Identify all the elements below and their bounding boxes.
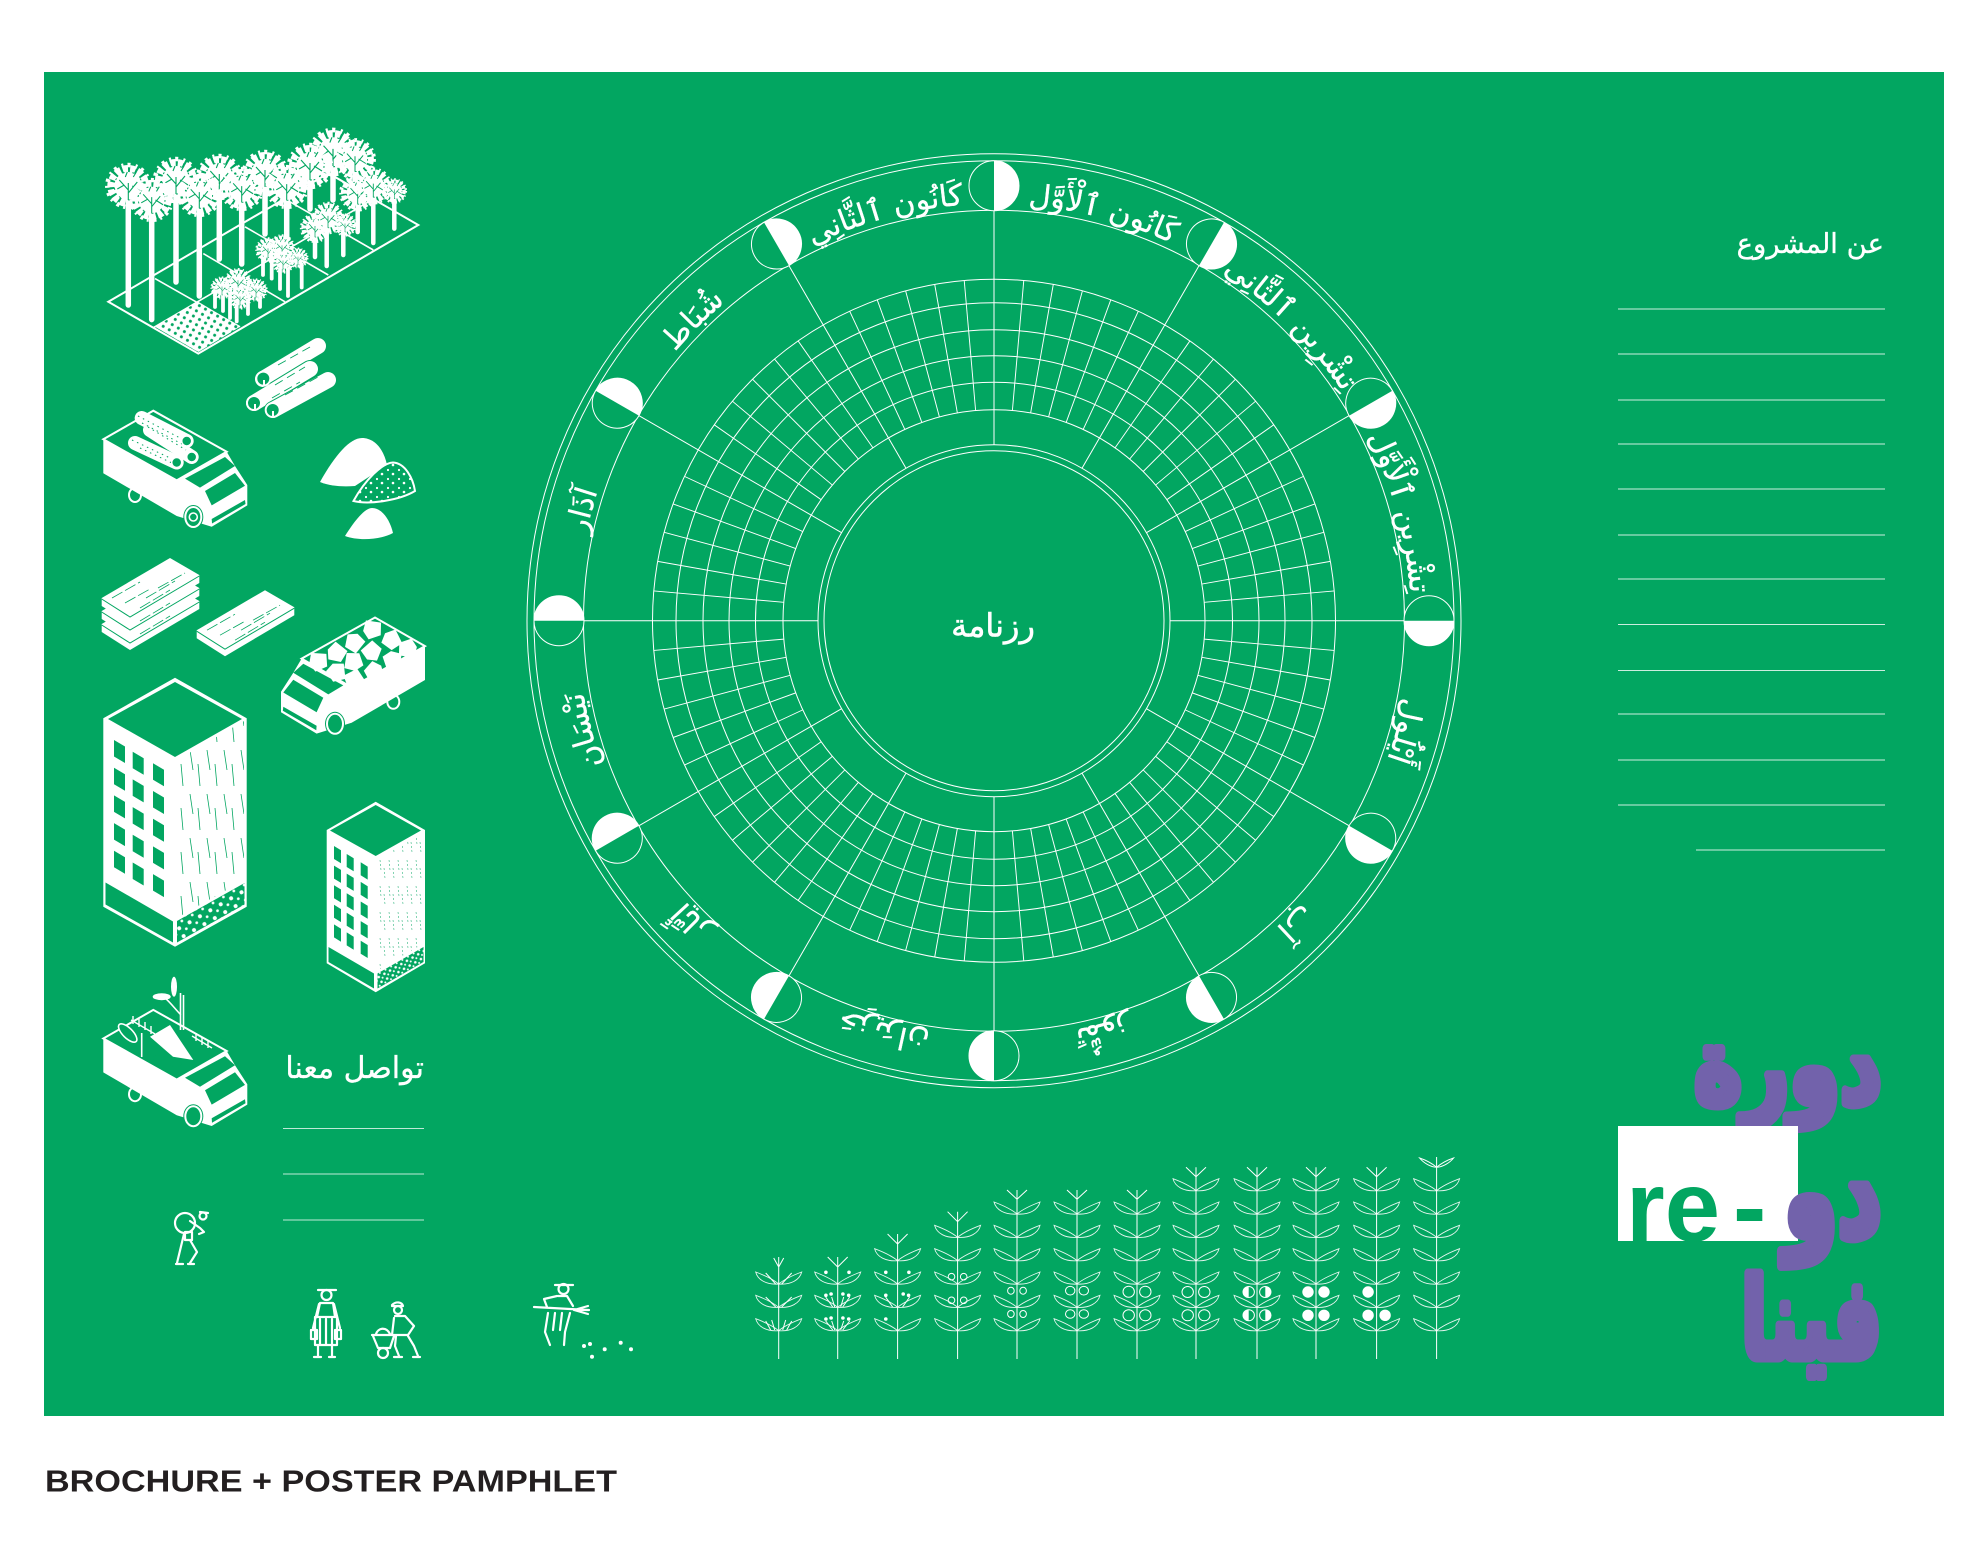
plant stage 12 [1414,1157,1460,1359]
logo line 2: دو [1780,1123,1882,1266]
illustration: stacked wood planks [102,558,199,650]
logo: re-do-fina wordmark [1618,1005,1882,1385]
plant stage 3 [875,1234,921,1359]
logo latin prefix: re [1626,1151,1720,1263]
calendar radial grid [654,280,1334,961]
caption: BROCHURE + POSTER PAMPHLET [45,1464,617,1498]
plant stage 9 [1234,1167,1280,1359]
plant stage 4 [935,1212,981,1359]
illustration: tree plantation plot [107,130,418,354]
calendar month spokes [584,211,1404,1031]
plant stage 1 [756,1257,802,1359]
plant stage 7 [1114,1190,1160,1359]
figure: woman with buckets [311,1290,341,1357]
logo line 3: فينا [1741,1255,1882,1385]
half-moon phase markers [534,161,1454,1081]
figure: worker carrying sack [175,1212,208,1264]
illustration: sand and gravel piles [320,438,415,539]
figure: farmer with pitchfork and seeds [534,1284,633,1359]
contact rule lines [283,1128,424,1220]
plant stage 6 [1054,1190,1100,1359]
plant stage 11 [1354,1167,1400,1359]
logo white block [1618,1126,1798,1241]
chart: circular calendar [526,153,1462,1088]
illustration: single wood plank [197,590,294,656]
plant stage 10 [1293,1167,1339,1359]
heading: about the project: عن المشروع [1737,228,1884,260]
plant stage 2 [815,1257,861,1359]
month labels on the ring: كَانُون ٱلْأَوَّل تِشْرِين ٱلثَّانِي تِشْرِين ٱلْأَوَّل أَيْلُول آب تَمُّوز حَزِيرَان أَيَّار نَيْسَان آذَار شُبَاط كَانُون ٱلثَّانِي [562,178,1436,1056]
chart: plant growth stages [756,1157,1460,1359]
about text rule lines [1618,309,1885,850]
illustration: truck carrying logs [103,411,247,529]
logo line 1: دورة [1694,1005,1882,1130]
heading: contact us: تواصل معنا [285,1051,424,1086]
calendar center title: رزنامة [951,607,1035,645]
plant stage 5 [994,1190,1040,1359]
figure: man with wheelbarrow [372,1302,420,1358]
illustration: stacked logs [247,346,328,417]
calendar rings [527,154,1461,1088]
illustration: small timber building [327,802,425,992]
plant stage 8 [1173,1167,1219,1359]
logo hyphen: - [1733,1151,1766,1263]
illustration: truck carrying stones [281,618,425,736]
illustration: truck carrying plants [103,977,247,1128]
illustration: large timber building [103,678,247,947]
